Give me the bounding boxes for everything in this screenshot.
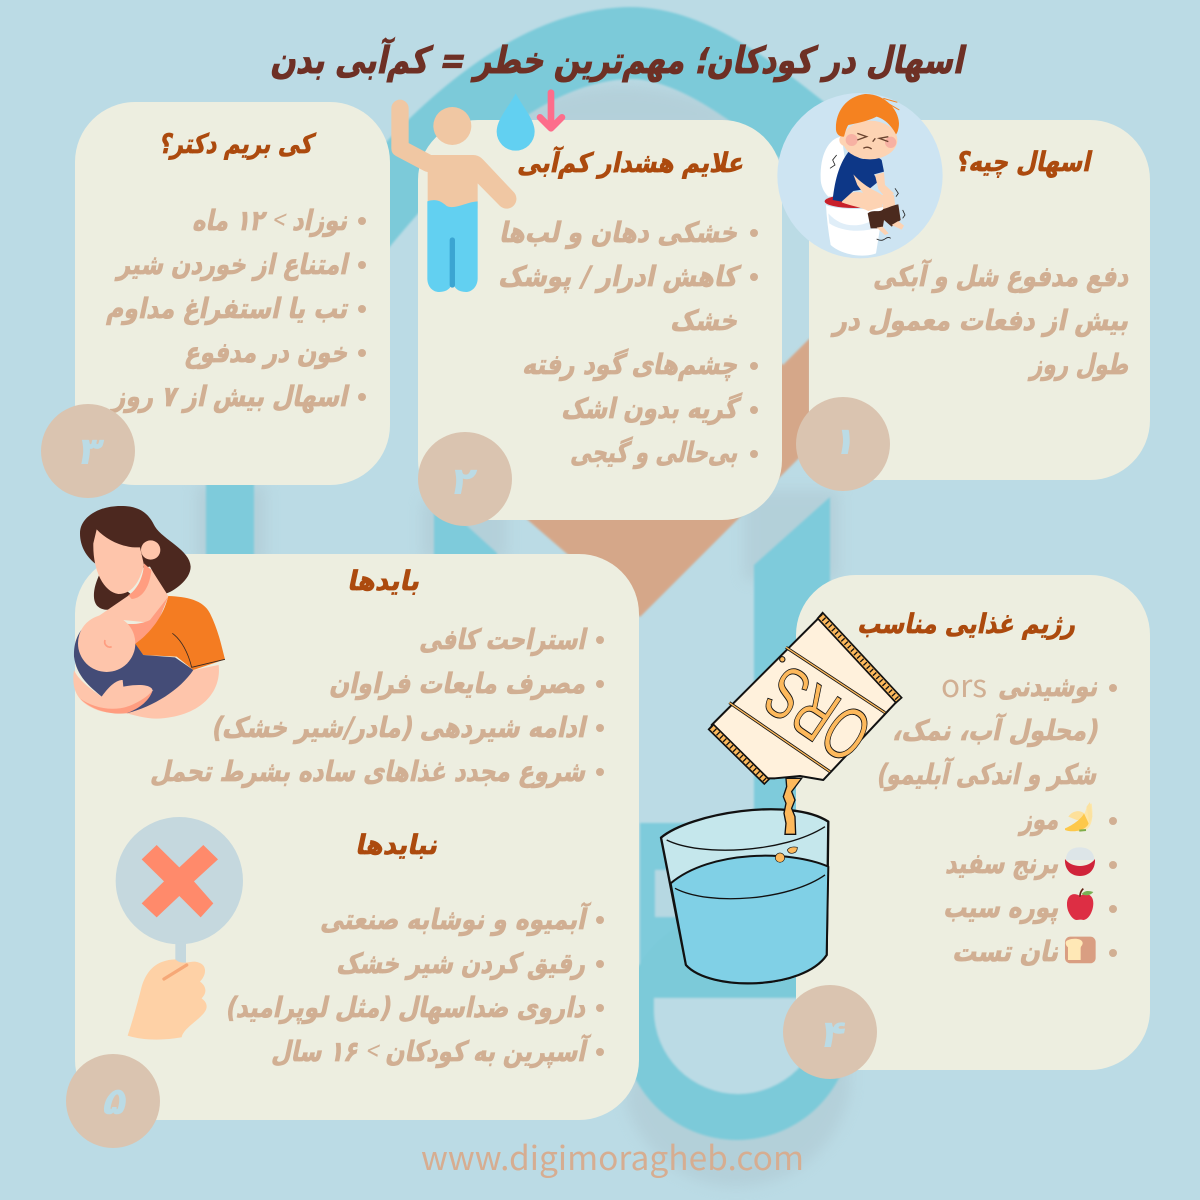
bullet list: doctor: خون در مدفوع	[183, 336, 352, 369]
badge: number 3: ۳	[74, 429, 107, 474]
bullet list: diet: نوشیدنی	[997, 670, 1102, 703]
packet crimp	[709, 613, 902, 784]
bullet list: warning signs: گریه بدون اشک	[560, 392, 743, 425]
glass body	[661, 809, 828, 983]
glass water	[671, 856, 828, 983]
bullet list: don'ts: آسپرین به کودکان > ۱۶ سال	[269, 1029, 593, 1070]
panel: card 3 when to see doctor	[75, 102, 390, 485]
badge: number 1	[796, 397, 890, 491]
icon: banana	[1065, 802, 1092, 832]
text block: definition	[830, 259, 1134, 381]
icon: ORS packet pouring into glass	[661, 613, 902, 983]
bullet list: don'ts	[224, 902, 604, 1070]
text block: definition: طول روز	[1027, 348, 1133, 381]
badge: number 4: ۴	[817, 1012, 850, 1057]
ORS stream	[783, 778, 802, 834]
bullet list: warning signs: کاهش ادرار / پوشک	[497, 260, 743, 293]
icon: down arrow	[540, 93, 562, 128]
ORS label: ORS	[750, 650, 885, 779]
panel: card 4 diet	[796, 575, 1150, 1070]
bullet list: diet: شکر و اندکی آبلیمو)	[875, 757, 1102, 791]
bullet list: diet	[875, 661, 1117, 968]
icon: toast	[1065, 937, 1096, 963]
badge: number 4	[783, 985, 877, 1079]
text block: definition: دفع مدفوع شل و آبکی	[872, 259, 1134, 293]
heading: what is diarrhea: اسهال چیه؟	[954, 147, 1095, 178]
bullet list: warning signs: خشکی دهان و لب‌ها	[498, 216, 742, 249]
bullet list: dos: مصرف مایعات فراوان	[328, 667, 590, 700]
badge: number 5	[66, 1054, 160, 1148]
heading: dos: بایدها	[346, 566, 424, 597]
bullet list: don'ts: آبمیوه و نوشابه صنعتی	[319, 902, 592, 936]
bullet list: warning signs: چشم‌های گود رفته	[521, 348, 742, 381]
ORS drops	[775, 847, 797, 862]
bullet list: don'ts: داروی ضداسهال (مثل لوپرامید)	[224, 991, 590, 1024]
heading: diet: رژیم غذایی مناسب	[856, 609, 1080, 640]
bullet list: doctor: تب یا استفراغ مداوم	[105, 292, 352, 325]
badge: number 3	[41, 404, 135, 498]
icon: apple	[1067, 889, 1093, 920]
bullet list: dos: شروع مجدد غذاهای ساده بشرط تحمل	[149, 755, 590, 788]
bullet list: doctor: نوزاد > ۱۲ ماه	[190, 198, 354, 239]
bullet list: diet: نان تست	[951, 935, 1063, 968]
bullet list: diet: پوره سیب	[942, 891, 1063, 924]
bullet list: warning signs: خشک	[669, 304, 742, 337]
bullet list: dos: استراحت کافی	[418, 623, 590, 656]
bullet list: diet: (محلول آب، نمک،	[891, 713, 1103, 747]
panel: card 5 dos and don'ts	[75, 554, 639, 1120]
title: اسهال در کودکان؛ مهم‌ترین خطر = کم‌آبی بدن	[268, 37, 971, 82]
text block: definition: بیش از دفعات معمول در	[830, 304, 1133, 337]
bullet list: doctor	[105, 198, 366, 413]
heading: when to see doctor: کی بریم دکتر؟	[157, 129, 317, 160]
footer website: www.digimoragheb.com	[421, 1132, 804, 1180]
bullet list: diet: برنج سفید	[944, 847, 1063, 880]
icon: water drop	[497, 93, 535, 151]
bullet list: doctor: اسهال بیش از ۷ روز	[109, 380, 352, 413]
panel: card 2 warning signs	[418, 120, 782, 520]
badge: number 2	[418, 432, 512, 526]
icon: mother and baby	[73, 506, 225, 719]
bullet list: doctor: امتناع از خوردن شیر	[114, 248, 352, 281]
bullet list: diet: ors	[941, 661, 987, 706]
bullet list: warning signs: بی‌حالی و گیجی	[569, 436, 742, 469]
bullet list: dos: ادامه شیردهی (مادر/شیر خشک)	[210, 711, 590, 744]
badge: number 1: ۱	[829, 419, 862, 464]
bullet list: diet: موز	[1017, 803, 1063, 836]
panel: card 1 what is diarrhea	[809, 120, 1150, 480]
badge: number 5: ۵	[99, 1079, 132, 1124]
bullet list: dos	[149, 623, 604, 788]
packet body	[712, 617, 897, 780]
icon: stop sign held in hand	[116, 817, 243, 1040]
heading: warning signs: علایم هشدار کم‌آبی	[516, 146, 748, 179]
bullet list: warning signs	[497, 216, 758, 469]
badge: number 2: ۲	[447, 459, 480, 504]
icon: rice bowl	[1065, 847, 1095, 876]
bullet list: don'ts: رقیق کردن شیر خشک	[335, 947, 590, 980]
icon: dehydrated person	[400, 93, 562, 292]
heading: don'ts: نبایدها	[354, 830, 442, 861]
icon: child on toilet	[777, 93, 943, 258]
